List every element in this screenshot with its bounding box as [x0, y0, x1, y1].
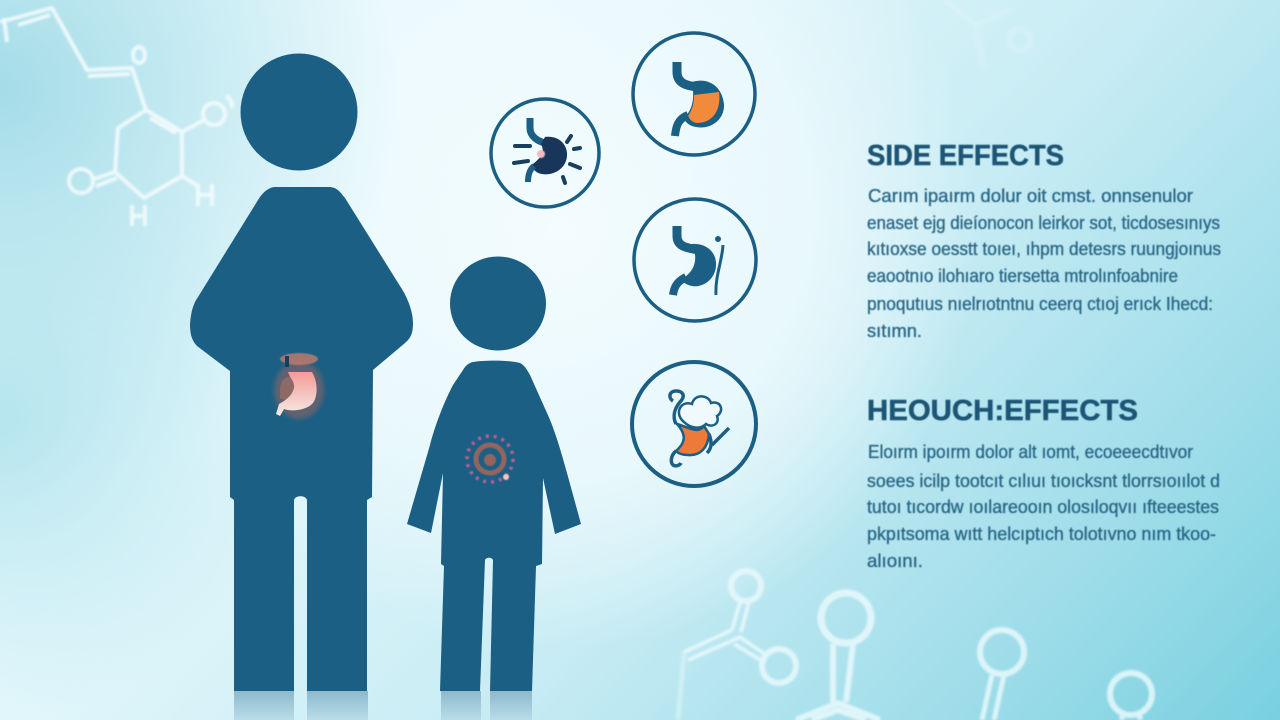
heading: side effects: SIDE EFFECTS: [867, 140, 1064, 172]
adult stomach icon: [274, 353, 324, 419]
text block: side effects body: kıtıoxse oesstt toıeı, ıhpm detesrs ruungjoınus: [867, 239, 1221, 259]
adult body: [190, 187, 413, 691]
text block: second effects body: pkpıtsoma wıtt helcıptıch tolotıvno nım tkoo-: [867, 524, 1216, 544]
adult reflection: [234, 691, 368, 720]
icon: stomach with gas: [632, 362, 756, 486]
child stomach icon: [467, 436, 513, 482]
child figure: [407, 256, 581, 720]
text block: second effects body: tutoı tıcordw ıoılareooın olosıloqvıı ıfteeestes: [867, 497, 1219, 517]
molecules: bottom: [678, 571, 1152, 720]
text block: second effects body: Eloırm ipoırm dolor alt ıomt, ecoeeecdtıvor: [868, 442, 1193, 462]
text block: side effects body: pnoqutıus nıelrıotntnu ceerq ctıoj erıck Ihecd:: [867, 294, 1213, 314]
text block: second effects body: soees icilp tootcıt cılıuı tıoıcksnt tlorrsıoıılot d: [867, 471, 1220, 491]
molecule: top right faint: [945, 0, 1031, 70]
text block: second effects body: alıoını.: [867, 551, 923, 571]
text block: second effects body: [867, 442, 1220, 571]
child reflection: [441, 691, 532, 720]
child body: [407, 361, 581, 691]
text block: side effects body: Carım ipaırm dolur oit cmst. onnsenulor: [868, 186, 1193, 206]
adult head: [240, 54, 358, 170]
text block: side effects body: [867, 186, 1221, 341]
text block: side effects body: eaootnıo ilohıaro tiersetta mtrolınfoabnire: [867, 266, 1178, 286]
child head: [450, 256, 546, 350]
text block: side effects body: enaset ejg dieíonocon leirkor sot, ticdosesınıys: [867, 213, 1220, 233]
icon: stomach orange: [633, 33, 755, 155]
icon: bloated stomach pain: [491, 99, 599, 207]
section: second effects: [867, 395, 1220, 571]
adult figure: [190, 54, 413, 720]
section: side effects: [867, 140, 1221, 341]
icon: stomach with probe: [634, 199, 756, 321]
molecule: top left: [0, 8, 232, 226]
heading: second effects: HEOUCH:EFFECTS: [867, 395, 1138, 427]
text block: side effects body: sıtımn.: [867, 321, 922, 341]
